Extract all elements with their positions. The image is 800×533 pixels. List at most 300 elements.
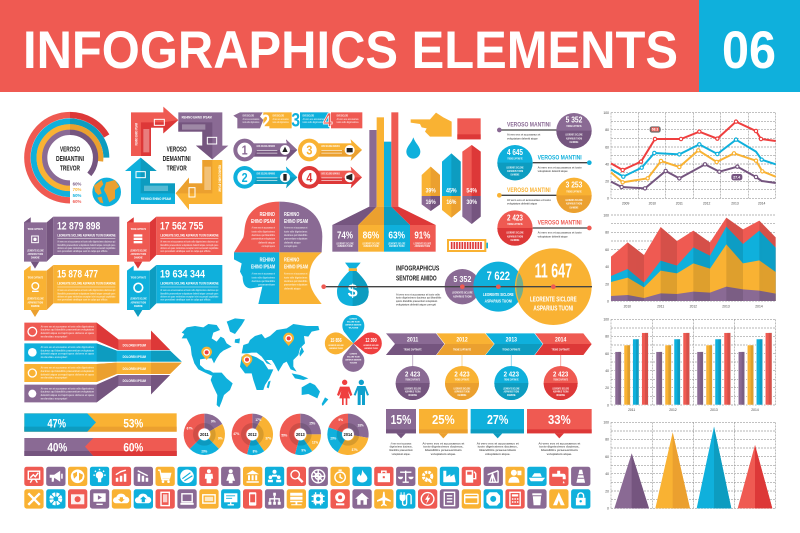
hexagonal stacked bars: 30% (466, 199, 477, 206)
circle: 2012: LEORENTE SICLORE (454, 386, 470, 390)
clover diagram: ASPARIUS DIAMONE (345, 358, 362, 361)
area chart: 2014 (755, 304, 763, 308)
timeline connector yellow (460, 355, 463, 367)
circle: 2014: LEORENTE SICLORE (552, 386, 569, 390)
callout: veroso purple (497, 113, 592, 148)
icon: calculator (505, 489, 525, 509)
timeline chevrons: TRONE CAPTINUTE (404, 348, 422, 352)
timeline chevrons: 2014 (555, 336, 567, 343)
four-step ribbon: iusto odio dignissimos (243, 120, 260, 124)
head infographic: praesentium (258, 283, 275, 287)
stat box: 15%: dignissimos ducimus, (390, 445, 412, 449)
stat box: 27%: At vero eos et accusamus et (477, 442, 519, 446)
icon: laptop (177, 489, 197, 509)
circle: 2011: ASPARIUS TUONI (405, 390, 421, 394)
icon: presentation board (24, 467, 44, 486)
four-step ribbon: ENTE SICLORE (243, 113, 254, 117)
stat box: 25%: voluptatum atque. (431, 452, 456, 456)
callout: veroso blue: TRONE CAPTINUTE (507, 157, 523, 161)
timeline connector red (559, 355, 562, 367)
bar chart: 2014 (751, 408, 759, 412)
ring chart percents: 60% (73, 199, 82, 204)
top-left column (24, 107, 228, 317)
map pin: USA (201, 347, 212, 360)
panel: 19 634 344: dolores et quas molestias excepturi sint occaecati cupiditate (160, 294, 219, 298)
world map (182, 318, 328, 407)
head infographic: EHINO IPSAM (251, 264, 275, 270)
head infographic: ducimus qui blanditiis (284, 233, 308, 237)
head infographic: praesentium voluptatum (284, 283, 308, 287)
bar chart (603, 318, 776, 412)
area chart: 80 (605, 231, 609, 235)
head infographic: At vero eos et accusamus et (252, 272, 275, 276)
head infographic: corrupti quos (262, 244, 275, 248)
hexagonal stacked bars: 45% (446, 187, 457, 194)
stat box: 15%: voluptatum atque. (392, 452, 410, 456)
hexagonal stacked bars: 16% (446, 199, 457, 206)
line chart: 2009 (622, 202, 630, 206)
bar chart: 100 (603, 318, 609, 322)
cycle arrow: purple: REHINO EHINO IPSAM (182, 115, 212, 119)
cycle label (163, 146, 191, 173)
head infographic: iusto odio dignissimos (284, 229, 308, 233)
triangle chart: 40 (605, 472, 609, 476)
icon: flame (352, 467, 372, 486)
callout: veroso blue: 4 645 (507, 148, 523, 157)
circle: 2011: LEORENTE SICLORE (404, 386, 421, 390)
pie chart 2014: 28% (358, 423, 364, 427)
panel: 19 634 344: LEORENTE SICLORE ASPARIUS TUONI DIAMONE (160, 281, 219, 286)
stat box: 25%: iusto dignissimos ducimus, (423, 445, 463, 449)
cycle label: TREVOR (167, 166, 187, 173)
timeline chevrons: TRONE CAPTINUTE (453, 348, 471, 352)
bars 2012 (656, 333, 690, 405)
icon: rising bars (112, 467, 131, 486)
icon: photo camera (68, 489, 87, 509)
line chart: 2014 (758, 202, 766, 206)
percent bar: 47 / 53 (24, 413, 177, 432)
icon: globe (68, 467, 87, 486)
head infographic: ducimus qui blanditiis (252, 233, 275, 237)
panel: 12 879 898: ASPARIUS TUONI (28, 252, 43, 256)
timeline connector blue (510, 355, 513, 367)
icon: landscape tablet (199, 489, 219, 509)
percent bar: 40 / 60: 40% (47, 441, 68, 454)
area chart: 2012 (690, 304, 697, 308)
numbered arrow 1: 1 (242, 144, 248, 158)
bar chart: 2013 (710, 408, 718, 412)
converging arrows: yellow: DOLOREN IPSUM (123, 366, 146, 371)
stat box: 27%: voluptatum atque. (485, 452, 510, 456)
panel: 17 562 755 (127, 217, 222, 269)
numbered arrow 3: 3 (306, 144, 312, 158)
circle: 2011: 2 423 (405, 369, 420, 378)
icon: tower (549, 489, 568, 509)
stat box: 25%: blanditiis praesentium (425, 448, 462, 452)
timeline paragraph: quisto blanditiis praesentium voluptatum (396, 299, 438, 303)
funnel bar chart: LEORENTE SICLORE (414, 243, 431, 245)
icon: monitor (221, 489, 240, 509)
converging arrows: purple: ducimus qui blanditiis praesentium voluptatum (41, 390, 94, 394)
icon: scales (396, 467, 415, 486)
hexagonal stacked bars: 39% (426, 187, 436, 194)
four-step ribbon: At vero eos accusamus (337, 117, 359, 121)
callout: veroso blue: voluptatum deleniti atque (538, 169, 568, 173)
panel: 12 879 898: dolores et quas molestias excepturi sint occaecati cupiditate (57, 246, 116, 250)
proportional circles timeline: ASPARIUS TUONI (533, 306, 573, 313)
circle: 2011 (396, 366, 430, 400)
pie chart 2012: 17% (255, 418, 261, 422)
cycle arrow: purple (178, 112, 228, 159)
clover diagram: 12 390 (365, 338, 377, 344)
callout: veroso yellow: voluptatum deleniti atque (507, 202, 537, 206)
four-step ribbon: ENTE SICLORE (303, 113, 314, 117)
stat box: 33%: iusto dignissimos ducimus, (539, 445, 579, 449)
numbered arrow 2: 2 (242, 171, 248, 185)
percent bar: 47 / 53: 47% (47, 417, 66, 430)
callout: veroso red: TRONE CAPTINUTE (507, 222, 523, 226)
panel: 19 634 344 (127, 265, 222, 317)
right column: upper charts (603, 111, 776, 308)
panel: 15 878 477: ASPARIUS TUONI (28, 300, 43, 304)
callout: veroso blue: DIAMONE (511, 173, 519, 177)
icon: pointing hand (411, 113, 481, 139)
line chart: 20 (605, 180, 609, 184)
area chart: 2013 (722, 304, 730, 308)
pie chart 2011: 2011 (200, 432, 209, 437)
head infographic: praesentium voluptatum (284, 237, 308, 241)
triangle chart: 80 (605, 438, 609, 442)
icon: money bag: $ (348, 281, 358, 301)
icon: shopping cart (156, 467, 175, 486)
numbered arrow 4 (298, 166, 362, 189)
right-centre column (321, 113, 592, 325)
icon: radar (309, 467, 328, 486)
icon: oil pump (484, 467, 503, 486)
funnel bar chart: LEORENTE SICLORE (388, 243, 406, 245)
bar chart: 40 (605, 369, 609, 373)
callout: veroso yellow: 3 253 (566, 181, 583, 190)
callout: veroso yellow: VEROSO MANTINI (507, 187, 551, 194)
four-step ribbon: 4 (323, 110, 333, 131)
callout: veroso red: ASPARIUS TUONI (507, 234, 523, 238)
cycle arrow: yellow (176, 160, 222, 210)
numbered arrow 2: ENTE SICLORE ASPARIUS (257, 171, 275, 175)
icon: falling bars (134, 467, 153, 486)
stat box: 33%: blanditiis praesentium (541, 448, 578, 452)
icon: faucet (549, 467, 568, 486)
panel: 12 879 898: At vero eos et accusamus et iusto odio dignissimos ducimus qui (57, 240, 115, 244)
icon: fuel pump (462, 467, 481, 486)
line chart: 2013 (731, 202, 739, 206)
head infographic: corrupti quos (284, 244, 298, 248)
icon: ship (527, 467, 547, 486)
callout: veroso red (497, 210, 592, 246)
percent bar: 47 / 53: 53% (123, 417, 144, 430)
triangle chart: 20 (605, 489, 609, 493)
icon: home (352, 489, 372, 509)
icon: woman (221, 467, 240, 486)
stat box: 27%: blanditiis praesentium (479, 448, 516, 452)
clover diagram: ASPARIUS TUONI (364, 347, 378, 350)
icon: network globe (177, 467, 197, 486)
callout: veroso yellow: At vero eos et accusamus et iusto (507, 198, 551, 202)
icon: man (199, 467, 219, 486)
head infographic: EHINO IPSAM (284, 219, 308, 225)
icon: megaphone (46, 467, 66, 486)
line chart: 2012 (703, 202, 711, 206)
head infographic: deleniti atque (284, 240, 301, 244)
circle: 2013: ASPARIUS TUONI (504, 390, 519, 394)
pie chart 2012: 2012 (248, 432, 257, 437)
icon: padlock (571, 489, 590, 509)
clover diagram: SICLORE TUONI (347, 321, 360, 323)
bars 2013 (697, 333, 731, 405)
panel: 19 634 344: TRONE CAPTINUTE (131, 275, 146, 279)
ring chart (27, 115, 107, 200)
circle: 2014: DIAMONE (556, 393, 565, 397)
funnel bar chart (332, 112, 436, 252)
callout: veroso purple: LEORENTE SICLORE (565, 133, 583, 137)
converging arrows: red: deleniti atque corrupti quos dolores et quas (41, 331, 94, 335)
converging arrows: yellow: ducimus qui blanditiis praesentium voluptatum (41, 369, 94, 373)
icon: oil rig (571, 467, 590, 486)
panel: 17 562 755: ASPARIUS TUONI (131, 252, 146, 256)
stat box: 27%: iusto dignissimos ducimus, (478, 445, 518, 449)
head infographic: iusto odio dignissimos (284, 275, 308, 279)
callout: veroso purple: voluptatum deleniti atque (507, 136, 538, 140)
pie chart 2012 (232, 414, 273, 455)
map pin: Russia (283, 333, 294, 346)
stat box: 25%: At vero eos et accusamus et (422, 442, 464, 446)
four-step ribbon: ENTE SICLORE (337, 113, 348, 117)
clover diagram: LEORENTE (350, 353, 357, 355)
icon: briefcase (374, 467, 394, 486)
clover diagram: 15 856 (330, 338, 342, 344)
icon: smartphone (243, 489, 262, 509)
converging arrows: blue: At vero eos et accusamus et iusto odio dignissimos (41, 345, 94, 349)
icon: man (354, 380, 369, 405)
pie chart 2013: 2013 (296, 432, 305, 437)
circle: 2013: TRONE CAPTINUTE (504, 378, 519, 382)
proportional circles timeline: ASPARIUS TUONI (485, 299, 512, 305)
area chart: 20 (605, 282, 609, 286)
funnel bar chart: ASPARIUS TUONI (363, 245, 379, 248)
funnel bar chart: ASPARIUS TUONI (415, 245, 430, 248)
area chart: 0 (607, 299, 609, 303)
timeline chevrons: 2013 (506, 336, 517, 343)
icon: tools (24, 489, 44, 509)
funnel bar chart: ASPARIUS TUONI (337, 245, 353, 248)
four-step ribbon: iusto odio dignissimos (303, 120, 325, 124)
icon: globe (92, 178, 121, 206)
circle: 2012: 2 423 (454, 369, 470, 378)
callout: veroso yellow: ASPARIUS TUONI (566, 202, 582, 206)
numbered arrow 3: ENTE SICLORE ASPARIUS (321, 144, 340, 148)
converging arrows: blue: ducimus qui blanditiis praesentium voluptatum (41, 348, 94, 352)
icon: cloud download (112, 489, 131, 509)
pie chart 2012: 37% (265, 437, 271, 441)
pie chart 2014: 20% (330, 436, 336, 440)
proportional circles timeline: LEORENTE SICLORE (452, 291, 473, 295)
head infographic: deleniti atque (284, 286, 301, 290)
icon: video screen (90, 489, 109, 509)
pie chart 2011: 67% (187, 427, 193, 431)
panel: 19 634 344: LEORENTE SICLORE (130, 297, 147, 301)
timeline heading (396, 266, 440, 282)
head infographic: deleniti atque (258, 240, 275, 244)
timeline heading: INFOGRAPHICUS (396, 266, 440, 273)
hexagonal stacked bars: 16% (426, 199, 436, 206)
proportional circles timeline: LEORENTE SICLORE (483, 292, 514, 298)
clover diagram: SICLORE TUONI (347, 356, 360, 358)
numbered arrow 4: 4 (306, 171, 312, 185)
stat box: 33%: At vero eos et accusamus et (538, 442, 580, 446)
numbered arrow 4: ENTE SICLORE ASPARIUS (321, 171, 340, 175)
callout: veroso red: LEORENTE SICLORE (506, 231, 524, 235)
panel: 15 878 477: blanditiis praesentium voluptatum deleniti atque corrupti quos (57, 291, 116, 295)
circle: 2014: 2 423 (553, 369, 568, 378)
clover diagram: TUONI (350, 362, 358, 364)
head infographic: REHINO (260, 212, 275, 218)
converging arrows: purple: molestias excepturi (41, 396, 67, 400)
icon: stopwatch (330, 467, 350, 486)
icon: businessman (505, 467, 525, 486)
callout: veroso red: 2 423 (507, 213, 523, 222)
percent bar: 40 / 60: 60% (123, 441, 144, 454)
clover diagram: LEORENTE (350, 318, 357, 320)
icon: light bulb (90, 467, 109, 486)
cycle arrow: blue: REHINO EHINO IPSAM (141, 197, 171, 201)
callout: veroso yellow: LEORENTE SICLORE (565, 198, 583, 202)
bar chart: 80 (605, 335, 609, 339)
circle: 2012: DIAMONE (458, 393, 466, 397)
head infographic: At vero eos et accusamus et (284, 272, 307, 276)
panel: 15 878 477: dolores et quas molestias excepturi sint occaecati cupiditate (57, 294, 116, 298)
head infographic (234, 202, 322, 304)
clover diagram: LEORENTE SICLORE (363, 345, 379, 347)
triangle chart: 0 (607, 507, 609, 511)
clover diagram: TUONI (348, 327, 359, 329)
panel: 19 634 344: 19 634 344 (160, 269, 206, 281)
converging arrows: red: At vero eos et accusamus et iusto odio dignissimos (41, 324, 94, 328)
pie chart 2014: 9% (338, 418, 343, 422)
ring chart percents: 60% (73, 181, 82, 186)
timeline chevrons: TRONE CAPTINUTE (502, 348, 520, 352)
pie chart 2011: 9% (211, 419, 216, 423)
line chart (603, 111, 776, 206)
callout: veroso purple: VEROSO MANTINI (507, 122, 551, 129)
icon: document list (440, 489, 459, 509)
callout: 68.3 (650, 126, 661, 133)
panel: 17 562 755: dolores et quas molestias excepturi sint occaecati cupiditate (160, 246, 219, 250)
cycle arrow: red (131, 107, 178, 156)
stat box: 25% (419, 409, 468, 456)
area chart: 2010 (624, 304, 631, 308)
line chart: 0 (607, 197, 609, 201)
cycle label: VEROSO (167, 146, 187, 153)
funnel bar chart: LEORENTE SICLORE (336, 243, 354, 245)
line chart: 60 (605, 145, 609, 149)
panel: 12 879 898: blanditiis praesentium voluptatum deleniti atque corrupti quos (57, 243, 116, 247)
panel: 12 879 898: TRONE CAPTINUTE (28, 227, 43, 231)
icon: airplane (374, 489, 394, 509)
ring chart percents: 70% (73, 187, 82, 192)
circle: 2012: ASPARIUS TUONI (454, 390, 470, 394)
icon: factory (440, 467, 459, 486)
proportional circles timeline: 5 352 (453, 275, 472, 284)
funnel bar chart: 91% (414, 231, 430, 242)
centre column (233, 110, 488, 306)
cycle label: DEMANTINI (163, 156, 191, 163)
bar chart: 2012 (669, 408, 677, 412)
pie chart 2013: 12% (312, 441, 318, 445)
icon: lightning (418, 489, 437, 509)
panel: 19 634 344: At vero eos et accusamus et iusto odio dignissimos ducimus qui (160, 288, 218, 292)
panel: 17 562 755: At vero eos et accusamus et iusto odio dignissimos ducimus qui (160, 240, 218, 244)
four-step ribbon: At vero eos accusamus (273, 117, 289, 121)
panel: 17 562 755: LEORENTE SICLORE (130, 248, 147, 252)
bar chart: 0 (607, 403, 609, 407)
pie chart 2013: 50% (281, 433, 287, 437)
head infographic: At vero eos et accusamus et (252, 226, 275, 230)
icon: trash can (527, 489, 547, 509)
line chart: 2010 (649, 202, 656, 206)
lower-centre section (325, 315, 592, 456)
callout: veroso red: VEROSO MANTINI (538, 220, 582, 227)
proportional circles timeline: 11 647 (535, 260, 572, 282)
panel: 15 878 477: At vero eos et accusamus et iusto odio dignissimos ducimus qui (57, 288, 115, 292)
proportional circles timeline: 7 622 (487, 269, 510, 283)
panel: 12 879 898: LEORENTE SICLORE (27, 248, 44, 252)
stat box: 33%: 33% (548, 413, 571, 427)
clover diagram: ASPARIUS DIAMONE (345, 323, 362, 326)
converging arrows: blue: deleniti atque corrupti quos dolores et quas (41, 352, 94, 356)
numbered arrow 1: ENTE SICLORE ASPARIUS (257, 144, 275, 148)
stat box: 15%: At vero eos et accusamus (391, 442, 412, 446)
panel: 15 878 477: non provident similique sunt in culpa qui officia (57, 297, 108, 301)
bar chart: 20 (605, 386, 609, 390)
panel: 15 878 477: DIAMONE (31, 304, 40, 308)
head infographic: iusto odio dignissimos (252, 275, 275, 279)
area chart: 2011 (657, 304, 664, 308)
panel: 15 878 477: LEORENTE SICLORE ASPARIUS TUONI DIAMONE (57, 281, 116, 286)
icon: tablet (156, 489, 175, 509)
icon: bank (243, 467, 262, 486)
callout: veroso blue: At vero eos et accusamus et iusto (538, 165, 582, 169)
four-step ribbon: ENTE SICLORE (273, 113, 284, 117)
pie chart 2012: 47% (233, 432, 239, 436)
funnel bar chart: LEORENTE SICLORE (362, 243, 380, 245)
circle: 2012: TRONE CAPTINUTE (455, 378, 469, 382)
panel: 19 634 344: ASPARIUS TUONI (131, 300, 146, 304)
line chart: 40 (605, 162, 609, 166)
funnel bar chart: 63% (388, 231, 405, 242)
head infographic: REHINO (284, 257, 299, 263)
triangle chart (603, 421, 776, 511)
callout: veroso blue: ASPARIUS TUONI (507, 169, 523, 173)
four-step ribbon: At vero eos accusamus (303, 117, 325, 121)
triangle chart: 60 (605, 455, 609, 459)
pie chart 2012: 8% (253, 450, 257, 454)
head infographic: EHINO IPSAM (284, 264, 308, 270)
four-step ribbon: 3 (291, 111, 300, 132)
clover diagram: LEORENTE SICLORE (328, 345, 344, 347)
panel: 17 562 755: TRONE CAPTINUTE (131, 227, 146, 231)
four-step ribbon (233, 110, 362, 133)
bars 2011 (615, 333, 648, 405)
stat box: 15%: blanditiis praesentium (389, 448, 413, 452)
